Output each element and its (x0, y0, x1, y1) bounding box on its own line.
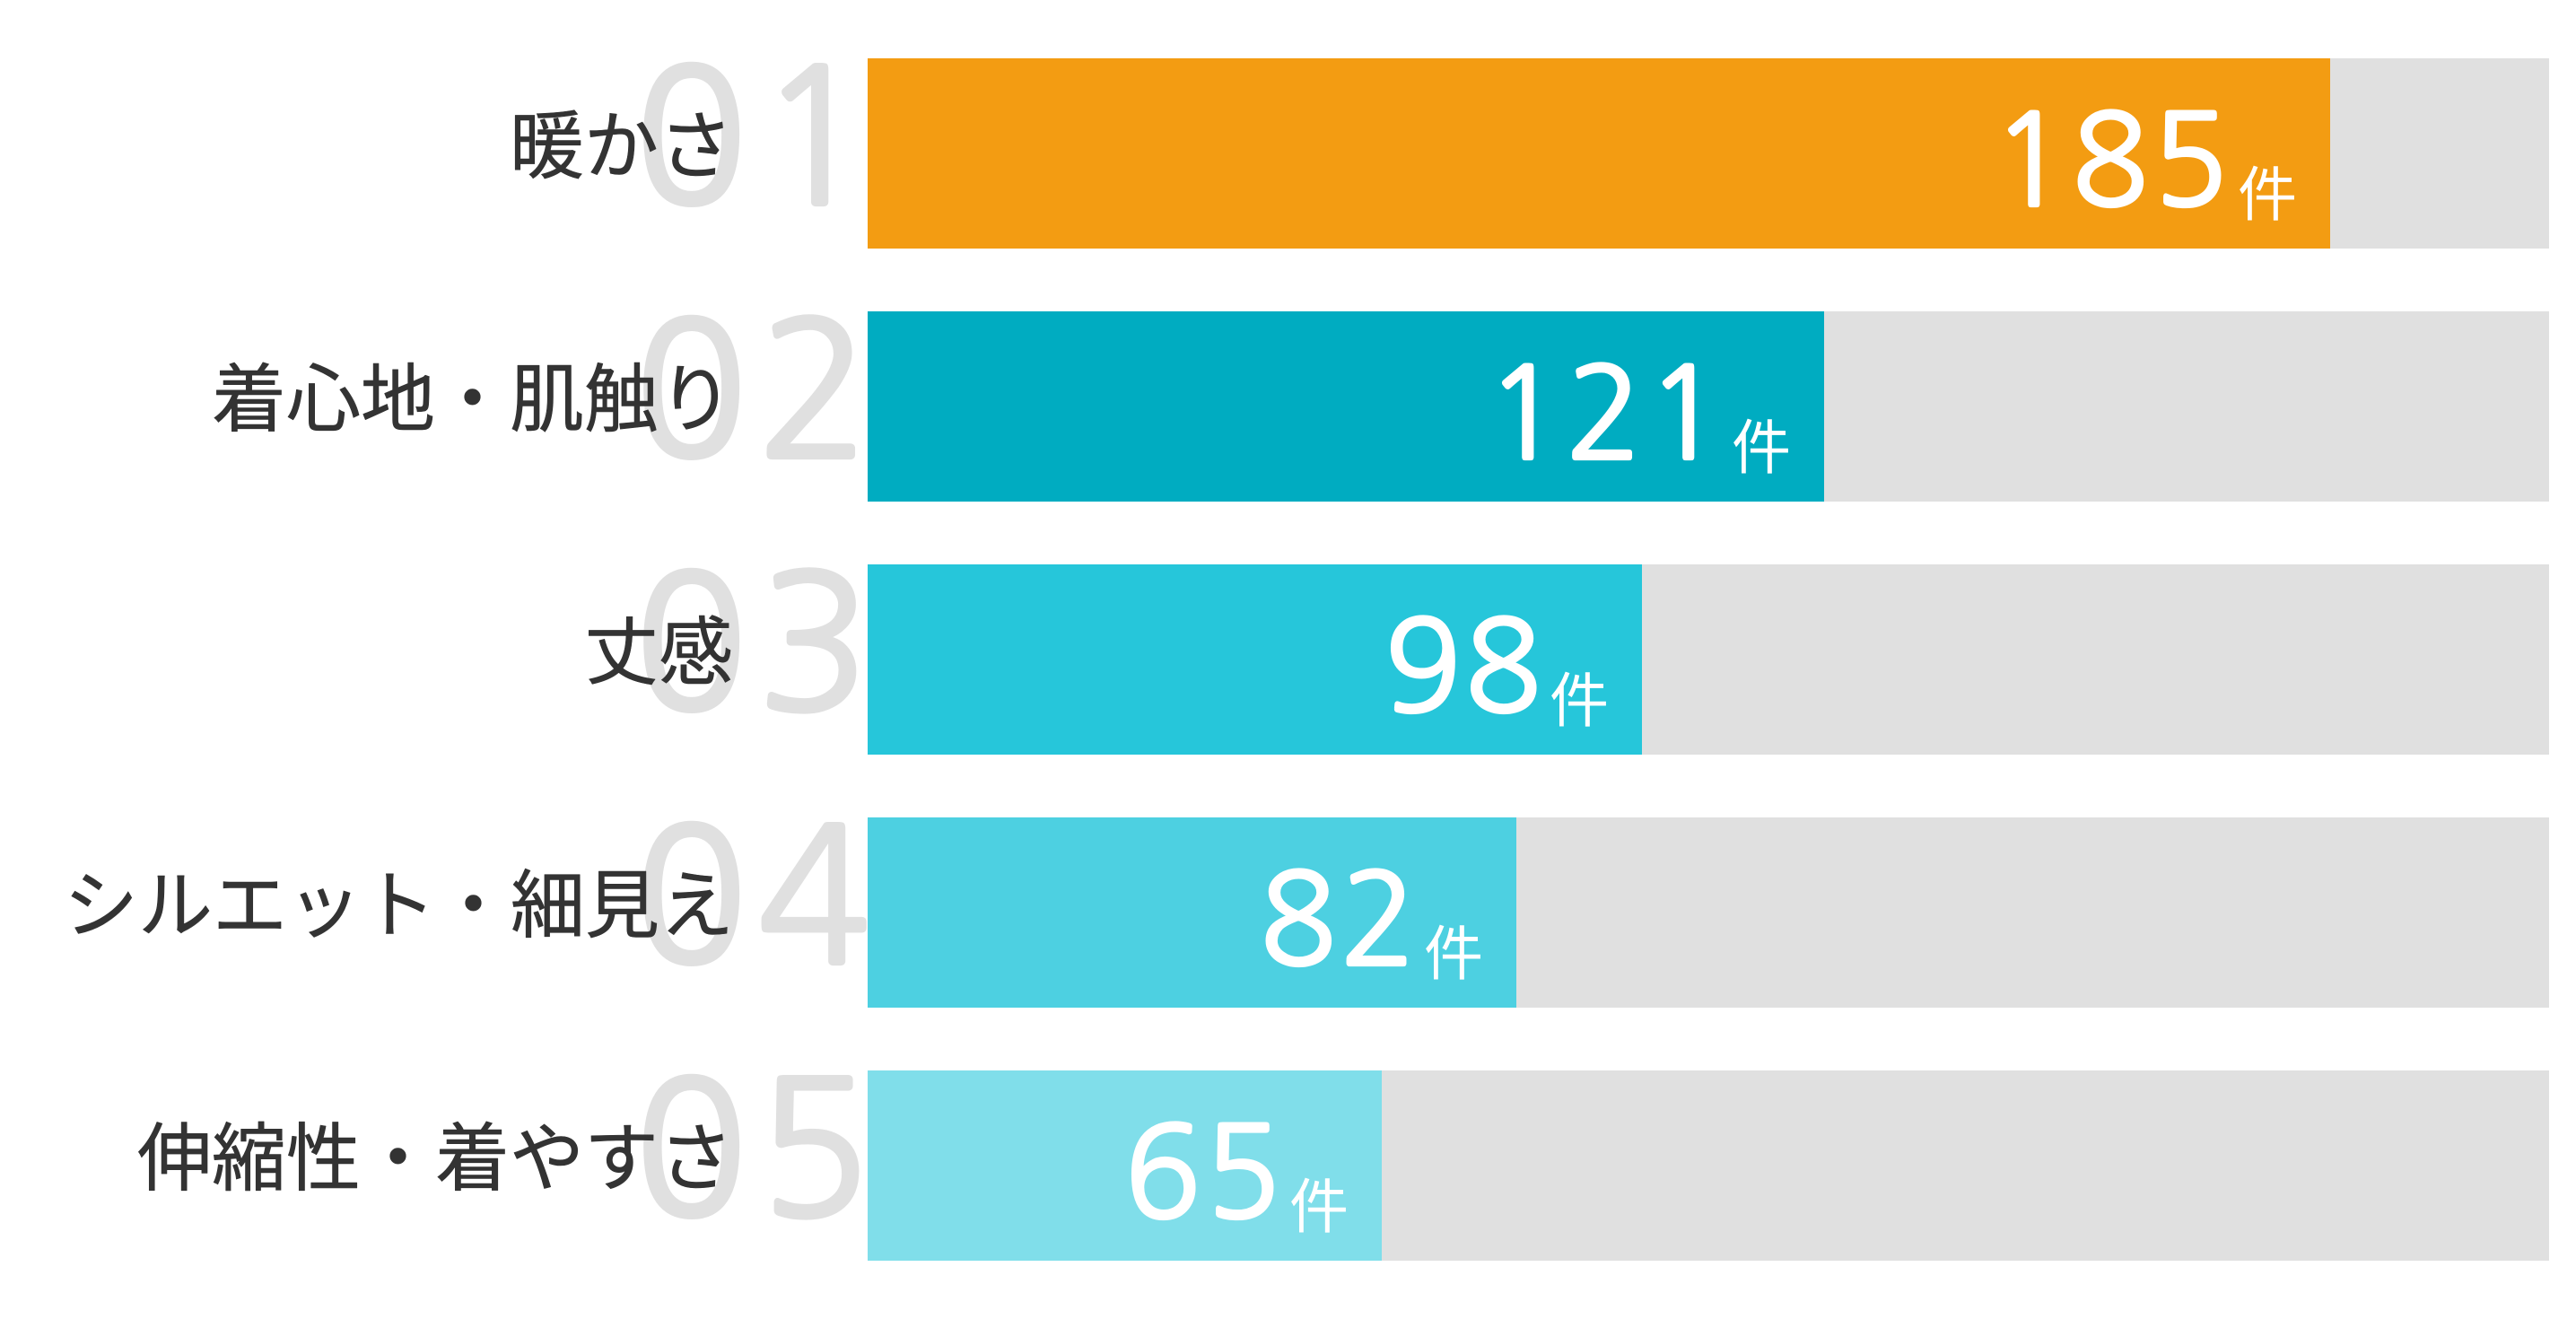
unit: 件 (1289, 1174, 1349, 1240)
bar track (868, 58, 2549, 249)
rank number 02: 02 (634, 297, 880, 484)
bar track (868, 817, 2549, 1008)
bar value fill (868, 817, 1516, 1008)
value 65: 65 (1124, 1110, 1285, 1236)
bar track (868, 1070, 2549, 1261)
rank number 01: 01 (634, 44, 880, 231)
label: 伸縮性・着やすさ (137, 1117, 733, 1201)
rank number 03: 03 (634, 550, 880, 737)
row 4: silhouette and slimming (64, 803, 2549, 1008)
value 185: 185 (1992, 98, 2232, 224)
bar value fill (868, 564, 1642, 755)
label: 着心地・肌触り (212, 358, 733, 441)
bar track (868, 564, 2549, 755)
row 2: comfort and texture (212, 297, 2549, 502)
value 121: 121 (1486, 351, 1726, 477)
bar value fill (868, 1070, 1382, 1261)
label: 暖かさ (510, 105, 733, 188)
value 98: 98 (1384, 604, 1545, 730)
row 5: stretch and ease of wear (137, 1056, 2549, 1261)
unit: 件 (1550, 668, 1609, 734)
label: シルエット・細見え (64, 864, 734, 948)
value 82: 82 (1260, 857, 1420, 983)
unit: 件 (1732, 415, 1791, 481)
row 3: durability (584, 550, 2549, 755)
rank number 04: 04 (634, 803, 880, 990)
row 1: warmth (510, 44, 2549, 249)
bar track (868, 311, 2549, 502)
bar value fill (868, 311, 1824, 502)
unit: 件 (2238, 162, 2297, 228)
label: 丈感 (584, 611, 733, 694)
unit: 件 (1424, 921, 1483, 987)
bar value fill (868, 58, 2330, 249)
rank number 05: 05 (634, 1056, 880, 1243)
